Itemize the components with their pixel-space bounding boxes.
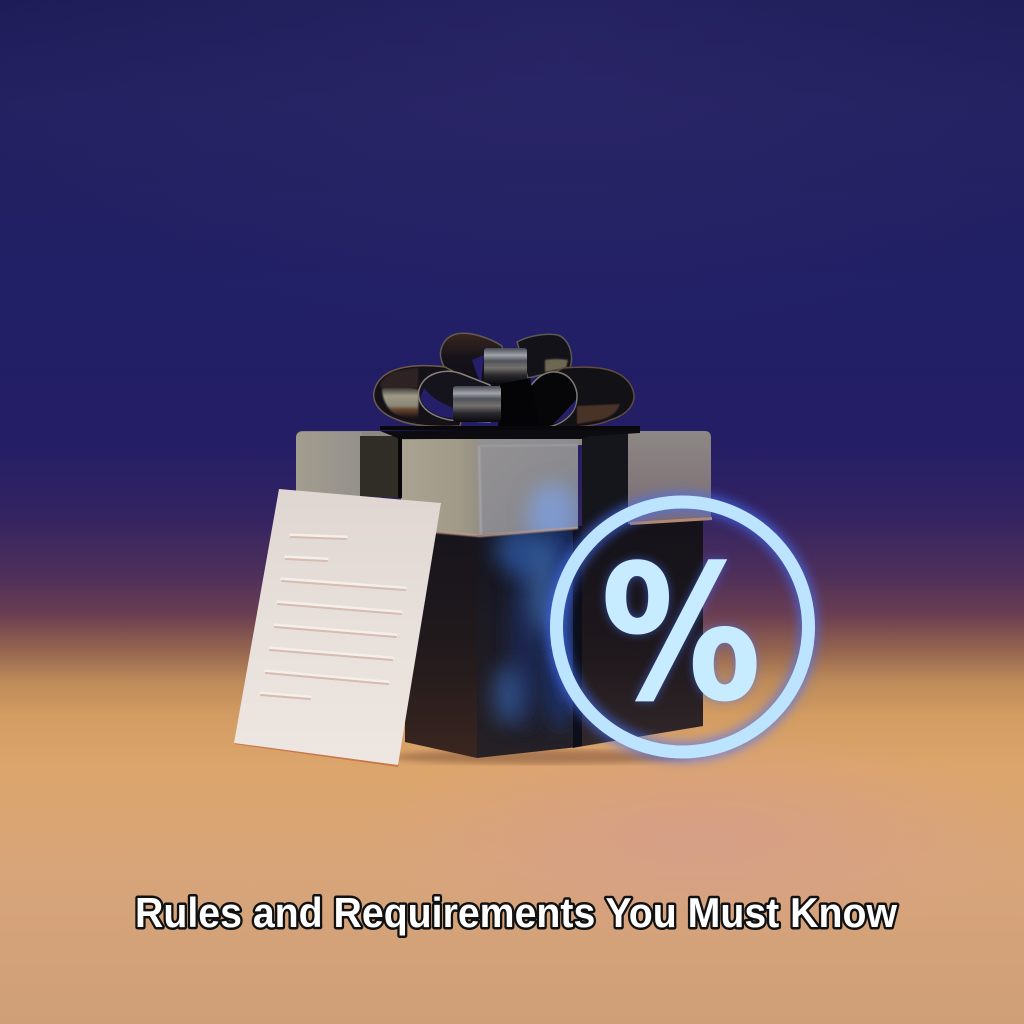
ribbon bands xyxy=(360,428,640,530)
right outer loop xyxy=(540,367,634,427)
gift box xyxy=(296,333,712,764)
back centre knot xyxy=(484,348,527,384)
box lid xyxy=(296,431,712,547)
back right loop xyxy=(517,334,572,378)
title: Rules and Requirements You Must Know xyxy=(135,889,897,936)
front left loop xyxy=(419,371,490,422)
lid highlights xyxy=(401,445,578,537)
document text lines xyxy=(261,535,405,699)
percent badge xyxy=(556,502,808,752)
bow base xyxy=(380,426,640,430)
neon ring xyxy=(556,502,808,752)
percent badge: % xyxy=(601,525,761,742)
document sheet xyxy=(234,489,441,767)
percent sign: % xyxy=(601,525,761,742)
floor shadow xyxy=(390,750,690,764)
ribbon bow xyxy=(374,333,640,430)
front right loop xyxy=(520,372,577,428)
centre dark mass xyxy=(498,378,540,430)
left outer loop xyxy=(374,366,470,426)
front knot xyxy=(453,386,501,422)
outer glow xyxy=(556,502,808,752)
box body xyxy=(405,510,703,758)
back left loop xyxy=(441,333,510,392)
